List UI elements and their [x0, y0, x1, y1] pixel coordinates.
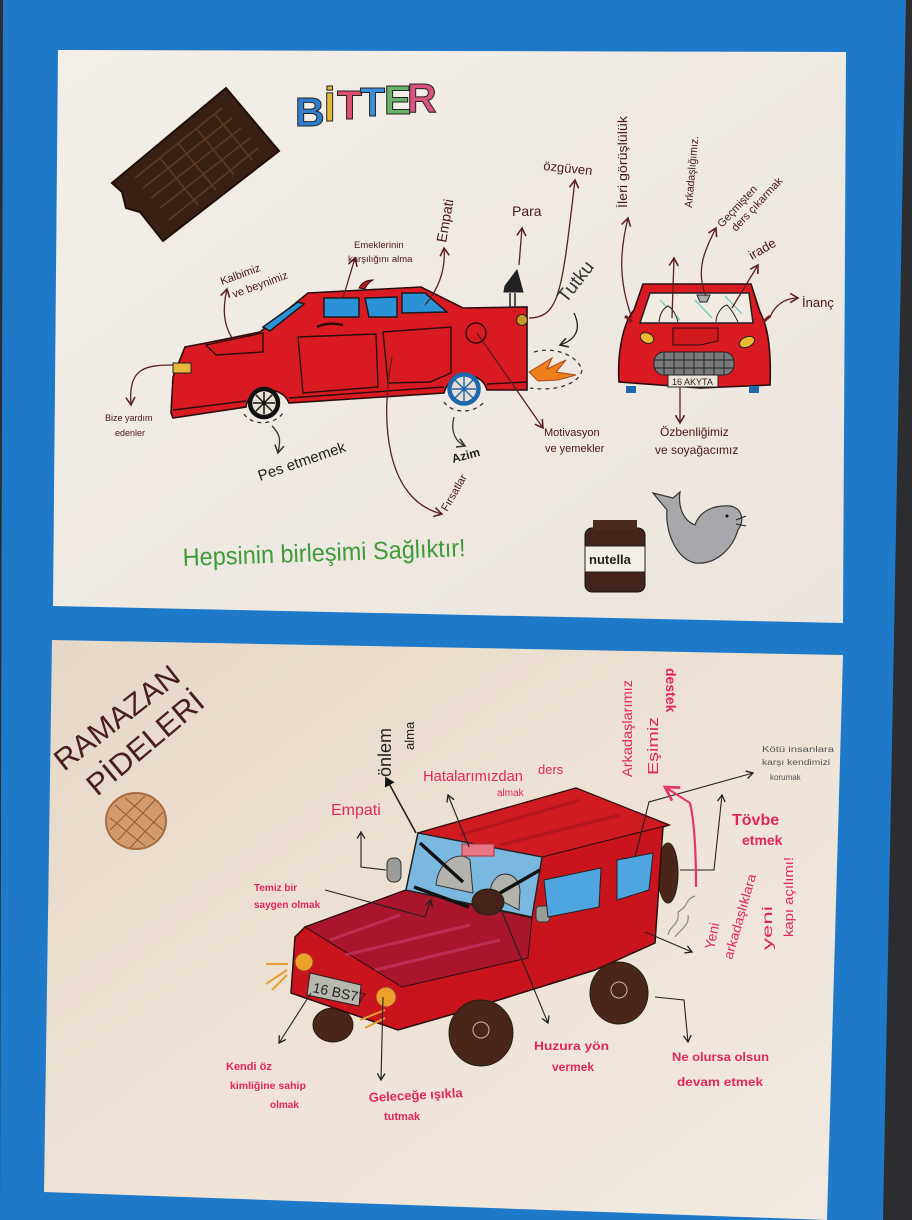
hood — [305, 890, 532, 987]
roof — [418, 788, 669, 857]
labels: Bitter callouts: özgüven — [543, 158, 593, 178]
labels: Bitter callouts: Kalbimiz — [219, 262, 262, 288]
labels: Ramazan callouts: destek — [663, 668, 679, 713]
car: red sedan front view — [619, 284, 770, 393]
car windows — [263, 293, 447, 331]
roof fin — [359, 280, 373, 289]
labels: Bitter callouts: ve yemekler — [545, 443, 605, 455]
exhaust flames — [529, 358, 576, 381]
icon: nutella jar — [585, 520, 645, 592]
labels: Ramazan callouts: Kendi öz — [226, 1061, 272, 1073]
title: Bitter: R — [407, 75, 437, 121]
labels: Ramazan callouts: etmek — [742, 832, 783, 848]
plate — [307, 973, 361, 1006]
icon: chocolate bar — [112, 88, 279, 241]
labels: Bitter callouts: karşılığını alma — [348, 254, 413, 265]
exhaust smoke — [668, 896, 695, 937]
title: Bitter: T — [360, 79, 385, 125]
steering hub — [472, 889, 504, 915]
title: Bitter: T — [337, 82, 362, 128]
spoiler — [504, 270, 523, 292]
icon: pide bread — [106, 793, 166, 849]
car: red jeep — [266, 788, 695, 1066]
labels: Bitter callouts: ders çıkarmak — [729, 175, 786, 234]
labels: Bitter callouts: irade — [746, 235, 779, 263]
wheels — [250, 374, 478, 417]
labels: Bitter callouts: Empati — [433, 198, 457, 244]
labels: Ramazan callouts: almak — [497, 788, 525, 799]
labels: Ramazan callouts: vermek — [552, 1060, 594, 1074]
labels: Ramazan callouts: Hatalarımızdan — [423, 768, 523, 785]
labels: Ramazan callouts: yeni — [759, 906, 775, 950]
title: Bitter — [295, 75, 437, 135]
labels: Bitter callouts: ve beynimiz — [231, 270, 290, 301]
title: Bitter: B — [295, 89, 325, 135]
labels: Ramazan callouts: ders — [538, 762, 564, 777]
labels: Ramazan callouts — [226, 668, 835, 1123]
labels: Bitter callouts: Arkadaşlığımız. — [683, 135, 701, 208]
labels: Ramazan callouts: Kötü insanlara — [762, 745, 835, 754]
labels: Ramazan callouts: Yeni — [701, 921, 722, 951]
labels: Bitter callouts: Özbenliğimiz — [660, 425, 729, 439]
labels: Bitter callouts: Azim — [450, 445, 481, 466]
labels: Ramazan callouts: Huzura yön — [534, 1039, 609, 1053]
labels: Ramazan callouts: kapı açılımı! — [781, 857, 796, 937]
car: red jeep: 16 BS77 — [311, 979, 367, 1006]
seats — [436, 856, 520, 910]
car: red sedan front view: 16 AKYTA — [672, 377, 713, 387]
labels: Bitter callouts: Tutku — [553, 257, 599, 307]
labels: Ramazan callouts: Eşimiz — [645, 717, 662, 775]
labels: Bitter callouts: İleri görüşlülük — [615, 115, 630, 208]
labels: Bitter callouts: Motivasyon — [544, 427, 600, 439]
labels: Ramazan callouts: saygen olmak — [254, 900, 321, 911]
labels: Ramazan callouts: alma — [402, 721, 417, 750]
panel: Ramazan Pideleri poster — [44, 640, 843, 1220]
labels: Ramazan callouts: arkadaşlıklara — [720, 871, 759, 961]
labels: Ramazan callouts: devam etmek — [677, 1075, 763, 1089]
arrows: Bitter callouts — [131, 180, 798, 514]
labels: Ramazan callouts: olmak — [270, 1100, 299, 1111]
arrows: Ramazan callouts — [279, 773, 753, 1080]
labels: Bitter callouts: Emeklerinin — [354, 240, 404, 251]
mirror — [462, 844, 494, 856]
panel: Bitter poster — [53, 50, 846, 623]
labels: Bitter callouts: Para — [512, 203, 542, 219]
labels: Ramazan callouts: kimliğine sahip — [230, 1080, 306, 1092]
labels: Ramazan callouts: Arkadaşlarımız — [619, 680, 635, 777]
labels: Bitter callouts — [105, 115, 834, 513]
labels: Ramazan callouts: karşı kendimizi — [762, 758, 830, 767]
labels: Bitter callouts: edenler — [115, 428, 145, 438]
labels: Ramazan callouts: Geleceğe ışıkla — [368, 1085, 464, 1105]
icon: seal — [653, 492, 746, 563]
labels: Ramazan callouts: tutmak — [384, 1111, 421, 1123]
labels: Ramazan callouts: Ne olursa olsun — [672, 1050, 769, 1064]
wheels — [449, 1000, 513, 1066]
heading: health statement: Hepsinin birleşimi Sağlıktır! — [182, 534, 466, 572]
title: Ramazan Pideleri — [48, 659, 211, 802]
labels: Ramazan callouts: Empati — [331, 802, 381, 819]
labels: Bitter callouts: ve soyağacımız — [655, 443, 738, 457]
labels: Ramazan callouts: Tövbe — [732, 812, 779, 829]
side windows — [544, 868, 601, 917]
labels: Ramazan callouts: korumak — [770, 773, 802, 782]
labels: Ramazan callouts: önlem — [375, 728, 395, 777]
car: red sedan side view — [171, 270, 582, 423]
labels: Bitter callouts: Fırsatlar — [439, 472, 470, 514]
rear lamp — [516, 314, 528, 326]
wipers — [414, 843, 540, 907]
front lamp — [173, 363, 191, 373]
body — [291, 788, 669, 1030]
labels: Bitter callouts: Pes etmemek — [256, 439, 348, 485]
title: Bitter: E — [384, 77, 411, 123]
car doors — [173, 323, 527, 410]
back wheels — [313, 1008, 353, 1042]
lamps — [295, 953, 313, 971]
labels: Ramazan callouts: Temiz bir — [254, 883, 297, 894]
icon: nutella jar: nutella — [589, 552, 632, 567]
windshield — [406, 833, 542, 917]
labels: Bitter callouts: Geçmişten — [715, 183, 760, 230]
title: Ramazan Pideleri: RAMAZAN — [48, 659, 187, 778]
labels: Bitter callouts: İnanç — [802, 295, 834, 310]
title: Bitter: İ — [324, 84, 335, 130]
labels: Bitter callouts: Bize yardım — [105, 413, 153, 423]
title: Ramazan Pideleri: PİDELERİ — [80, 685, 211, 802]
